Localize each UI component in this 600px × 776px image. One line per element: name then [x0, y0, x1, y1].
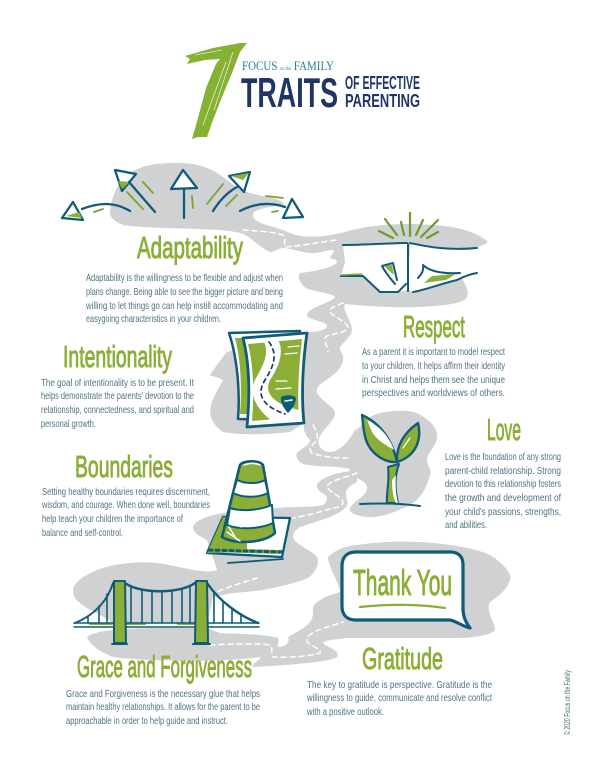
logo: Focus on the Family: FOCUS on the FAMILY	[242, 59, 334, 73]
text: Grace and Forgiveness body: maintain healthy relationships. It allows for the parent to be	[66, 701, 260, 713]
text: Grace and Forgiveness body: approachable in order to help guide and instruct.	[66, 715, 228, 727]
text: Boundaries body: balance and self-control.	[42, 527, 123, 539]
text: Gratitude body: willingness to guide, communicate and resolve conflict	[306, 692, 492, 704]
text: Grace and Forgiveness body	[66, 688, 260, 727]
text: Love body: the growth and development of	[445, 492, 561, 504]
text: Gratitude body: The key to gratitude is perspective. Gratitude is the	[307, 679, 492, 691]
title: big brush seven	[185, 43, 247, 139]
icon: folded map	[229, 331, 307, 427]
text: Boundaries body: wisdom, and courage. When done well, boundaries	[41, 499, 210, 511]
heading: Adaptability: Adaptability	[137, 230, 243, 265]
winding gray road background	[73, 163, 510, 667]
title: of effective parenting	[345, 73, 420, 111]
text: Respect body: to your children. It helps affirm their identity	[362, 360, 506, 372]
text: Intentionality body	[41, 377, 194, 430]
icon: suspension bridge	[74, 581, 259, 644]
text: Adaptability body: plans change. Being able to see the bigger picture and being	[86, 286, 283, 298]
heading: Gratitude: Gratitude	[362, 641, 443, 676]
text: Adaptability body: Adaptability is the willingness to be flexible and adjust when	[86, 272, 283, 284]
text: Intentionality body: personal growth.	[41, 418, 96, 430]
heading: Respect: Respect	[403, 309, 465, 344]
title: of effective parenting: PARENTING	[345, 91, 420, 111]
text: Adaptability body: easygoing characteristics in your children.	[86, 313, 221, 325]
text: Adaptability body: willing to let things go can help instill accommodating and	[85, 300, 283, 312]
text: Gratitude body: with a positive outlook.	[306, 706, 384, 718]
text: Respect body: As a parent it is important to model respect	[362, 346, 505, 358]
text: Boundaries body	[41, 486, 210, 539]
text: Gratitude body	[306, 679, 492, 718]
heading: Intentionality: Intentionality	[63, 339, 172, 374]
icon: fist bump	[341, 213, 500, 292]
icon: thank you speech bubble: Thank You	[353, 562, 452, 603]
text: Love body	[445, 451, 561, 531]
road centre dashes	[210, 230, 357, 657]
icon: arrows pointing outward	[62, 170, 303, 220]
text: Intentionality body: helps demonstrate the parents' devotion to the	[41, 390, 194, 402]
copyright note: © 2020 Focus on the Family	[563, 670, 572, 735]
heading: Grace and Forgiveness: Grace and Forgiveness	[77, 649, 252, 684]
text: Grace and Forgiveness body: Grace and Forgiveness is the necessary glue that helps	[66, 688, 260, 700]
text: Love body: your child's passions, strengths,	[445, 506, 561, 518]
text: Respect body: in Christ and helps them see the unique	[362, 374, 505, 386]
title: of effective parenting: OF EFFECTIVE	[345, 73, 420, 93]
icon: traffic cone	[207, 461, 290, 563]
text: Adaptability body	[85, 272, 283, 325]
icon: thank you speech bubble	[342, 552, 470, 628]
text: Love body: and abilities.	[445, 519, 487, 531]
heading: Love: Love	[487, 412, 521, 447]
text: Love body: parent-child relationship. Strong	[445, 465, 561, 477]
text: Boundaries body: help teach your children the importance of	[42, 513, 183, 525]
text: Intentionality body: The goal of intentionality is to be present. It	[41, 377, 194, 389]
text: Respect body: perspectives and worldviews of others.	[362, 387, 505, 399]
title: traits: TRAITS	[241, 69, 338, 116]
text: Intentionality body: relationship, connectedness, and spiritual and	[41, 404, 194, 416]
heading: Boundaries: Boundaries	[75, 449, 173, 484]
text: Respect body	[362, 346, 506, 399]
icon: sprouting plant	[360, 415, 420, 506]
text: Boundaries body: Setting healthy boundaries requires discernment,	[42, 486, 210, 498]
